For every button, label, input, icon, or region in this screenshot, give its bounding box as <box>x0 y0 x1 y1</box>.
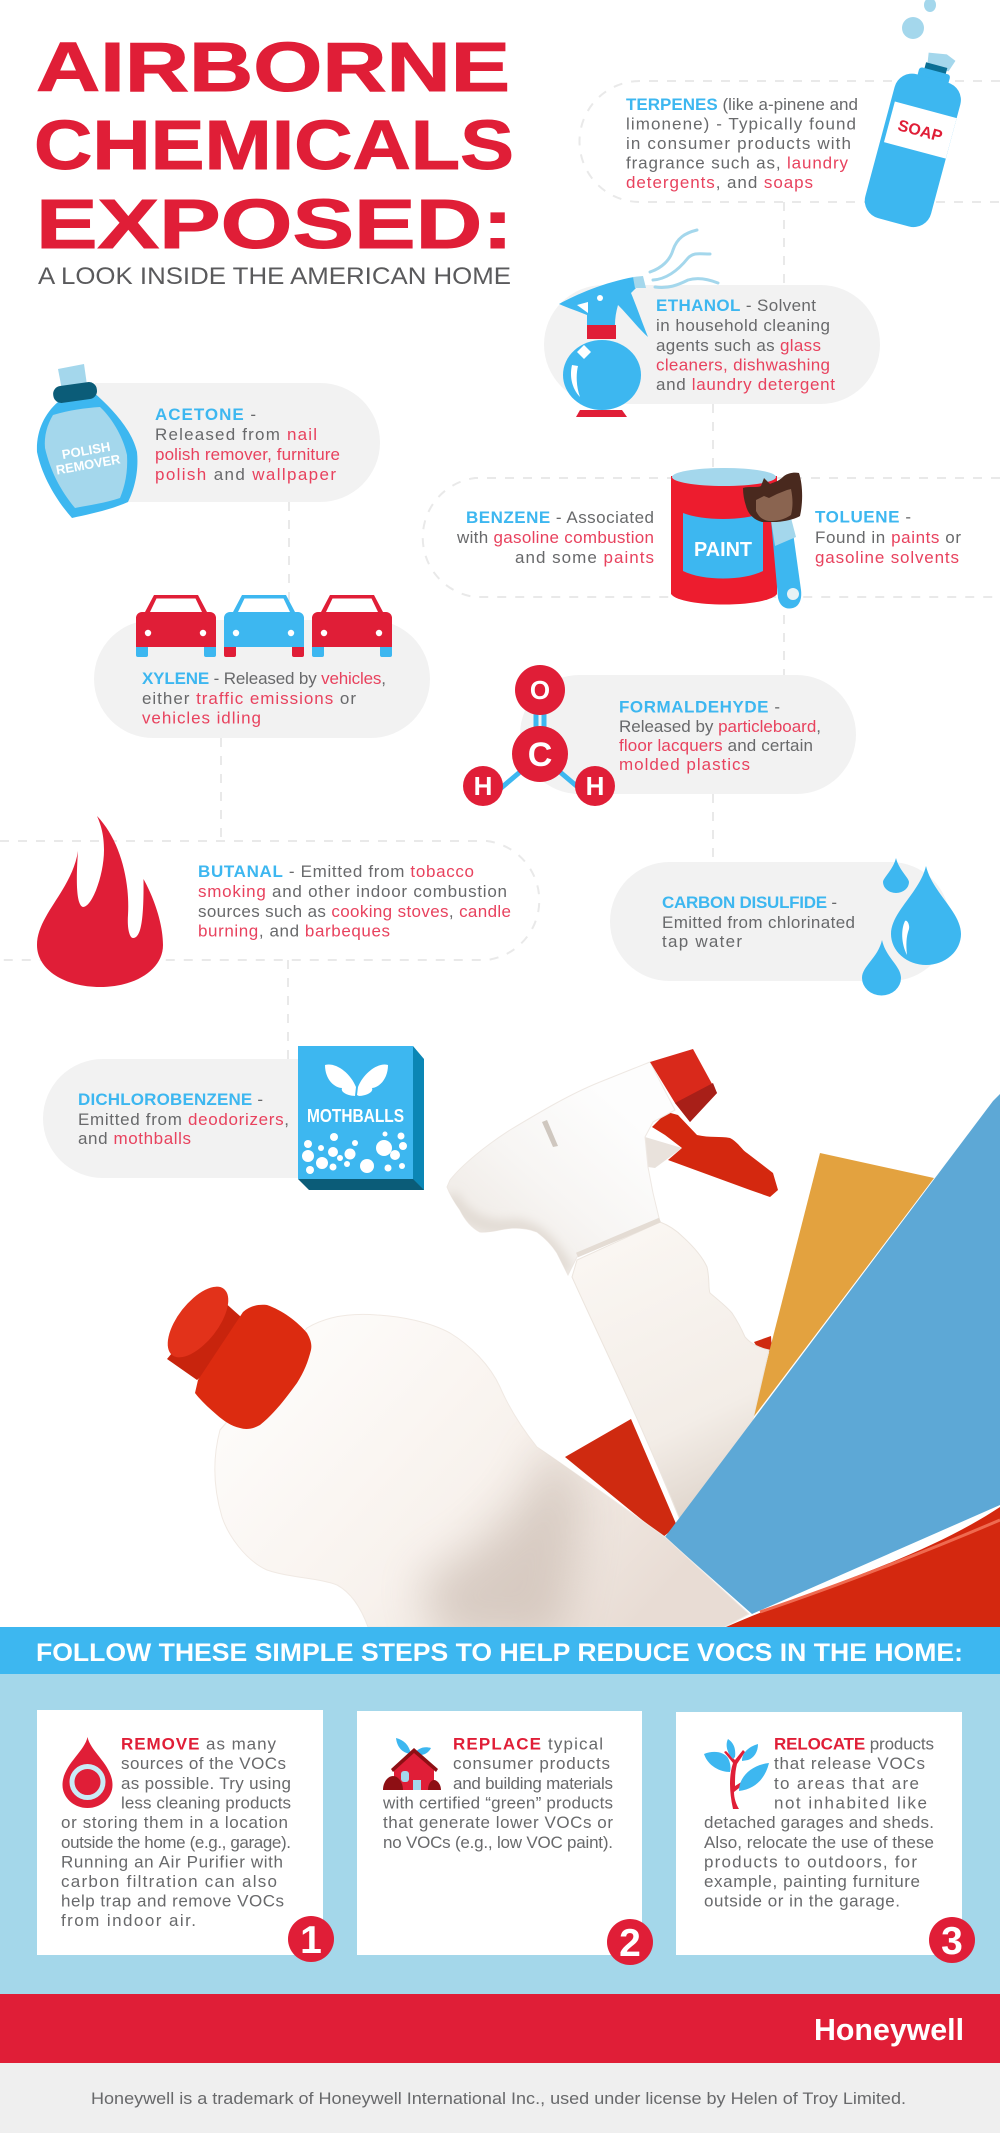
badge 3 <box>929 1917 975 1963</box>
icon: mothballs box <box>298 1046 424 1190</box>
text: dichlorobenzene: and mothballs <box>78 1129 191 1148</box>
text: terpenes: fragrance such as, laundry <box>626 154 848 172</box>
text: replace: that generate lower VOCs or <box>383 1813 613 1832</box>
blue sponge <box>665 1094 1000 1614</box>
text: relocate: not inhabited like <box>774 1794 927 1812</box>
text: replace: consumer products <box>453 1754 610 1773</box>
icon: polish remover bottle <box>37 364 137 518</box>
spray bottle body <box>572 1222 769 1520</box>
text: remove: from indoor air. <box>61 1911 196 1930</box>
icon: soap bottle: SOAP <box>896 117 944 146</box>
icon: polish remover bottle: REMOVER <box>55 451 122 478</box>
text: relocate: RELOCATE products <box>774 1734 934 1754</box>
text: relocate: Also, relocate the use of these <box>704 1833 934 1852</box>
section: steps header: FOLLOW THESE SIMPLE STEPS TO HELP REDUCE VOCS IN THE HOME: <box>36 1639 963 1667</box>
icon: drop <box>62 1737 112 1808</box>
icon: spray mist <box>650 230 718 288</box>
pill: ethanol <box>544 285 880 404</box>
text: benzene: BENZENE - Associated <box>466 508 654 527</box>
text: terpenes: limonene) - Typically found <box>626 114 856 134</box>
text: benzene <box>456 508 654 567</box>
text: relocate: products to outdoors, for <box>704 1852 917 1872</box>
text: remove: REMOVE as many <box>121 1734 276 1754</box>
text: formaldehyde: molded plastics <box>619 755 750 774</box>
text: acetone: polish and wallpaper <box>155 465 336 484</box>
text: formaldehyde: Released by particleboard, <box>619 717 821 736</box>
text: acetone <box>155 405 340 484</box>
title <box>34 28 514 263</box>
spray nozzle <box>650 1049 717 1122</box>
panel: benzene and toluene <box>456 468 961 609</box>
text: replace: REPLACE typical <box>453 1734 603 1754</box>
text: benzene: and some paints <box>515 548 654 567</box>
text: ethanol: ETHANOL - Solvent <box>656 296 816 315</box>
icon: paint can <box>671 468 777 604</box>
icon: paint can: PAINT <box>694 539 752 561</box>
panel: acetone <box>37 364 380 518</box>
text: remove: outside the home (e.g., garage). <box>61 1833 291 1852</box>
badge 1: 1 <box>300 1919 322 1962</box>
icon: soap bubbles <box>902 0 936 39</box>
pill: xylene <box>94 620 430 738</box>
title: CHEMICALS <box>34 106 514 184</box>
icon: plant <box>704 1739 769 1809</box>
footer disclaimer: Honeywell is a trademark of Honeywell International Inc., used under license by Helen of Troy Limited. <box>91 2089 906 2108</box>
text: remove: Running an Air Purifier with <box>61 1852 283 1872</box>
panel: ethanol <box>544 230 880 417</box>
text: carbon disulfide: tap water <box>662 932 742 951</box>
text: remove: less cleaning products <box>121 1794 291 1812</box>
badge 2 <box>607 1919 653 1965</box>
text: formaldehyde: FORMALDEHYDE - <box>619 698 780 716</box>
footer brand bar: Honeywell <box>814 2012 964 2047</box>
text: remove: as possible. Try using <box>121 1774 291 1793</box>
icon: molecule: O <box>530 675 550 705</box>
bucket interior <box>565 1336 772 1537</box>
pill: dichlorobenzene <box>43 1059 300 1178</box>
bottle cap <box>156 1277 311 1429</box>
icon: molecule <box>463 665 615 806</box>
panel: terpenes <box>626 0 972 231</box>
card 1: remove <box>37 1710 334 1962</box>
icon: polish remover bottle: POLISH <box>61 439 112 462</box>
text: ethanol: in household cleaning <box>656 316 830 335</box>
text: ethanol: and laundry detergent <box>656 375 835 394</box>
icon: molecule: H <box>586 771 604 801</box>
spray trigger <box>645 1112 778 1197</box>
card 3: relocate <box>676 1712 975 1963</box>
dashed connector outlines <box>0 81 1000 1059</box>
text: butanal: smoking and other indoor combustion <box>198 882 507 901</box>
icon: molecule: C <box>528 736 552 774</box>
text: dichlorobenzene <box>78 1090 289 1148</box>
text: terpenes <box>626 95 858 192</box>
panel: xylene <box>94 595 430 738</box>
text: xylene <box>142 669 386 728</box>
bucket rim <box>726 1507 1000 1627</box>
subtitle: A LOOK INSIDE THE AMERICAN HOME <box>38 263 511 290</box>
icon: molecule: H <box>474 771 492 801</box>
spray head <box>447 1062 675 1275</box>
text: toluene: TOLUENE - <box>815 508 911 526</box>
badge 3: 3 <box>941 1920 963 1963</box>
title: AIRBORNE <box>36 28 510 106</box>
icon: spray bottle <box>559 276 648 417</box>
icon: house <box>383 1738 441 1790</box>
panel: butanal <box>37 816 511 987</box>
pill: carbon disulfide <box>610 862 950 981</box>
icon: paint brush <box>743 473 802 609</box>
text: ethanol <box>656 296 835 394</box>
icon: soap bottle <box>861 44 972 231</box>
text: carbon disulfide: Emitted from chlorinated <box>662 913 855 932</box>
text: toluene <box>815 508 961 567</box>
text: ethanol: agents such as glass <box>656 336 821 355</box>
text: terpenes: TERPENES (like a-pinene and <box>626 95 858 114</box>
footer disclaimer <box>0 2063 1000 2133</box>
text: terpenes: detergents, and soaps <box>626 173 813 192</box>
text: remove: or storing them in a location <box>61 1813 288 1832</box>
text: benzene: with gasoline combustion <box>456 528 654 547</box>
text: formaldehyde: floor lacquers and certain <box>619 736 813 755</box>
text: xylene: XYLENE - Released by vehicles, <box>142 669 386 688</box>
text: carbon disulfide: CARBON DISULFIDE - <box>662 893 837 912</box>
title: EXPOSED: <box>36 185 513 263</box>
panel: dichlorobenzene <box>43 1046 424 1190</box>
text: remove: help trap and remove VOCs <box>61 1892 284 1910</box>
text: relocate: to areas that are <box>774 1774 919 1793</box>
text: replace: and building materials <box>453 1774 613 1793</box>
icon: water drops <box>862 858 961 995</box>
text: replace <box>382 1734 613 1852</box>
text: relocate: example, painting furniture <box>704 1872 920 1891</box>
text: acetone: ACETONE - <box>155 405 256 424</box>
photo: cleaning supplies in bucket <box>156 1049 1000 1640</box>
text: xylene: either traffic emissions or <box>142 689 356 708</box>
text: formaldehyde <box>619 698 821 774</box>
text: ethanol: cleaners, dishwashing <box>656 356 830 374</box>
text: dichlorobenzene: DICHLOROBENZENE - <box>78 1090 263 1109</box>
text: replace: no VOCs (e.g., low VOC paint). <box>383 1833 613 1852</box>
text: replace: with certified “green” products <box>382 1794 613 1812</box>
badge 2: 2 <box>619 1922 641 1965</box>
text: acetone: polish remover, furniture <box>155 445 340 464</box>
text: terpenes: in consumer products with <box>626 134 851 153</box>
icon: red car <box>312 595 392 657</box>
pill: formaldehyde <box>520 675 856 794</box>
text: remove <box>61 1734 291 1930</box>
section: steps header <box>0 1627 1000 1674</box>
panel: formaldehyde <box>463 665 856 806</box>
text: relocate: that release VOCs <box>774 1754 925 1773</box>
text: xylene: vehicles idling <box>142 708 261 728</box>
text: carbon disulfide <box>662 893 855 951</box>
text: toluene: Found in paints or <box>815 528 961 547</box>
icon: red car <box>136 595 216 657</box>
orange sponge <box>752 1153 934 1419</box>
text: relocate <box>704 1734 934 1910</box>
text: relocate: detached garages and sheds. <box>704 1813 934 1832</box>
icon: mothballs box: MOTHBALLS <box>307 1106 404 1126</box>
text: butanal: burning, and barbeques <box>198 922 390 940</box>
icon: blue car <box>224 595 304 657</box>
white bottle <box>215 1314 749 1640</box>
text: dichlorobenzene: Emitted from deodorizers, <box>78 1110 289 1129</box>
footer brand bar <box>0 1994 1000 2063</box>
section: steps <box>0 1674 1000 1994</box>
pill: acetone <box>95 383 380 502</box>
text: butanal: BUTANAL - Emitted from tobacco <box>198 862 474 881</box>
rim highlight <box>760 1520 1000 1612</box>
panel: carbon disulfide <box>610 858 961 995</box>
icon: flame <box>37 816 163 987</box>
text: butanal <box>198 862 511 940</box>
text: relocate: outside or in the garage. <box>704 1892 900 1910</box>
badge 1 <box>288 1916 334 1962</box>
text: butanal: sources such as cooking stoves, candle <box>198 902 511 921</box>
card 2: replace <box>357 1711 653 1965</box>
text: remove: sources of the VOCs <box>121 1754 286 1773</box>
text: remove: carbon filtration can also <box>61 1872 277 1891</box>
text: acetone: Released from nail <box>155 425 317 444</box>
text: toluene: gasoline solvents <box>815 548 959 567</box>
